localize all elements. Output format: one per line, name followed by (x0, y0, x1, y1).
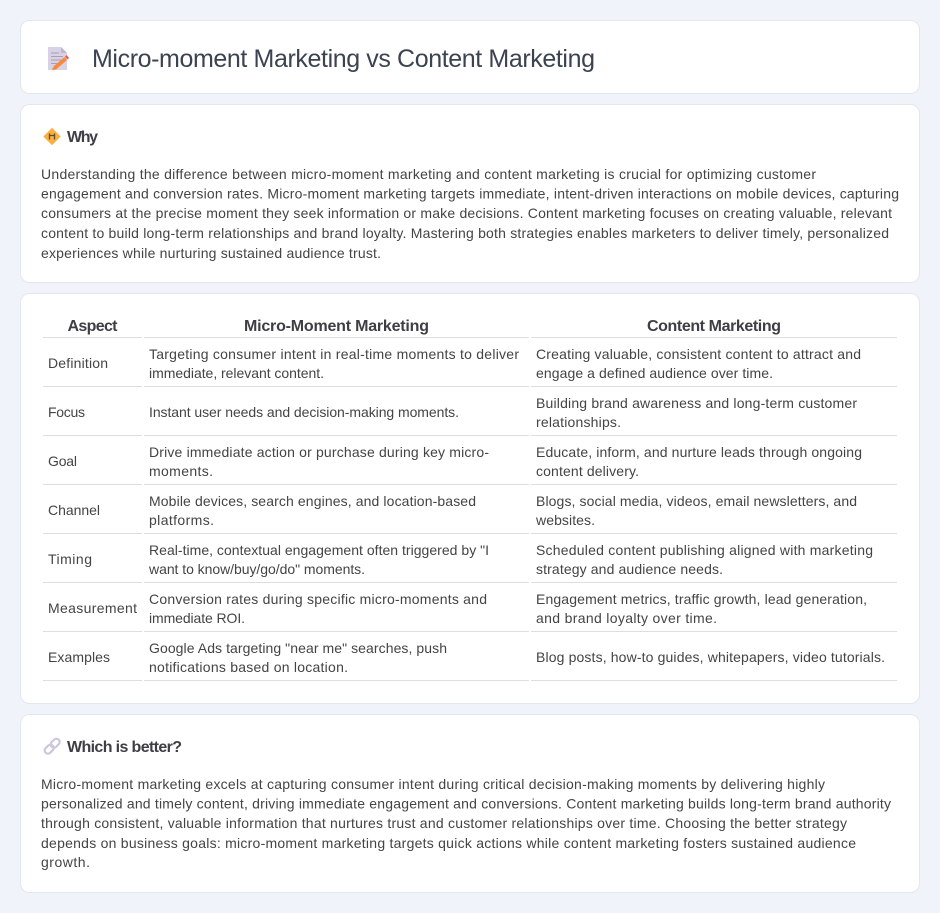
table row: focus: relationships. (536, 414, 621, 430)
table row: goal: Drive immediate action or purchase during key micro- (149, 444, 489, 460)
panel: comparison table (20, 294, 920, 704)
table row: channel: Blogs, social media, videos, email newsletters, and (536, 493, 857, 509)
table row: channel: platforms. (149, 512, 214, 528)
icon: diamond road sign (44, 128, 60, 144)
table row: measurement: Engagement metrics, traffic growth, lead generation, (536, 591, 867, 607)
heading: why: Why (67, 129, 98, 146)
table row: timing (48, 542, 873, 577)
text block: which is better paragraph (41, 776, 891, 870)
table row: goal: content delivery. (536, 463, 639, 479)
table row: goal: Educate, inform, and nurture leads through ongoing (536, 444, 862, 460)
table header row: Micro-Moment Marketing (244, 318, 429, 335)
table row: channel (48, 493, 857, 528)
table row: measurement: immediate ROI. (149, 610, 245, 626)
panel: title header (20, 20, 920, 94)
text block: which is better paragraph: through consistent, valuable information that nurtures trust and customer relationships over time. Choosing the better strategy (41, 815, 847, 831)
table row: timing: Scheduled content publishing aligned with marketing (536, 542, 873, 558)
table row: channel: Channel (48, 502, 100, 518)
icon: link (43, 737, 61, 755)
table row: definition: Targeting consumer intent in real-time moments to deliver (149, 346, 519, 362)
text block: why paragraph (41, 166, 899, 261)
table row: definition: engage a defined audience over time. (536, 365, 773, 381)
panel: which is better (20, 714, 920, 892)
table row: goal: moments. (149, 463, 213, 479)
table row: focus: Focus (48, 404, 85, 420)
table row: channel: websites. (535, 512, 595, 528)
table row: channel: Mobile devices, search engines, and location-based (149, 493, 476, 509)
table row: measurement: Conversion rates during specific micro-moments and (149, 591, 487, 607)
table row: measurement: and brand loyalty over time. (536, 610, 717, 626)
text block: which is better paragraph: depends on business goals: micro-moment marketing targets quick actions while content marketing fosters sustained audience (41, 835, 856, 851)
table row: focus (48, 395, 857, 430)
text block: why paragraph: Understanding the difference between micro-moment marketing and content marketing is crucial for optimizing customer (41, 166, 816, 182)
table row: focus: Instant user needs and decision-making moments. (149, 404, 459, 420)
text block: why paragraph: consumers at the precise moment they seek information or make decisions. Content marketing focuses on creating valuable, relevant (41, 205, 892, 221)
table row: goal (48, 444, 862, 479)
table header row: Aspect (68, 318, 118, 335)
table row: timing: Timing (48, 551, 92, 567)
table row: goal: Goal (48, 453, 77, 469)
table row: examples: Google Ads targeting "near me" searches, push (149, 640, 447, 656)
heading: which is better: Which is better? (67, 739, 182, 756)
table row: definition: Definition (48, 355, 108, 371)
table row: definition: immediate, relevant content. (149, 365, 324, 381)
table row: measurement (48, 591, 867, 626)
table header row (68, 318, 781, 335)
icon: memo with pencil (48, 47, 69, 70)
table row: timing: strategy and audience needs. (536, 561, 723, 577)
table row: examples: Examples (48, 649, 110, 665)
table row: timing: want to know/buy/go/do" moments. (148, 561, 365, 577)
table row: examples: Blog posts, how-to guides, whitepapers, video tutorials. (536, 649, 885, 665)
text block: which is better paragraph: personalized and timely content, driving immediate engagement and conversions. Content marketing builds long-term brand authority (41, 796, 891, 812)
table row: examples: notifications based on location. (149, 659, 348, 675)
text block: why paragraph: experiences while nurturing sustained audience trust. (41, 245, 381, 261)
title: Micro-moment Marketing vs Content Marketing (92, 45, 595, 73)
table header row: Content Marketing (647, 318, 781, 335)
table row: timing: Real-time, contextual engagement often triggered by "I (149, 542, 489, 558)
table row: focus: Building brand awareness and long-term customer (536, 395, 857, 411)
text block: why paragraph: content to build long-term relationships and brand loyalty. Mastering both strategies enables marketers to deliver timely, personalized (41, 225, 889, 241)
text block: which is better paragraph: growth. (41, 854, 90, 870)
table row: definition (48, 346, 861, 381)
table row: measurement: Measurement (48, 600, 137, 616)
text block: why paragraph: engagement and conversion rates. Micro-moment marketing targets immediate, intent-driven interactions on mobile devices, capturing (41, 186, 899, 202)
table row: examples (48, 640, 885, 675)
panel: why (20, 104, 920, 282)
table row: definition: Creating valuable, consistent content to attract and (536, 346, 861, 362)
text block: which is better paragraph: Micro-moment marketing excels at capturing consumer intent during critical decision-making moments by delivering highly (41, 776, 825, 792)
